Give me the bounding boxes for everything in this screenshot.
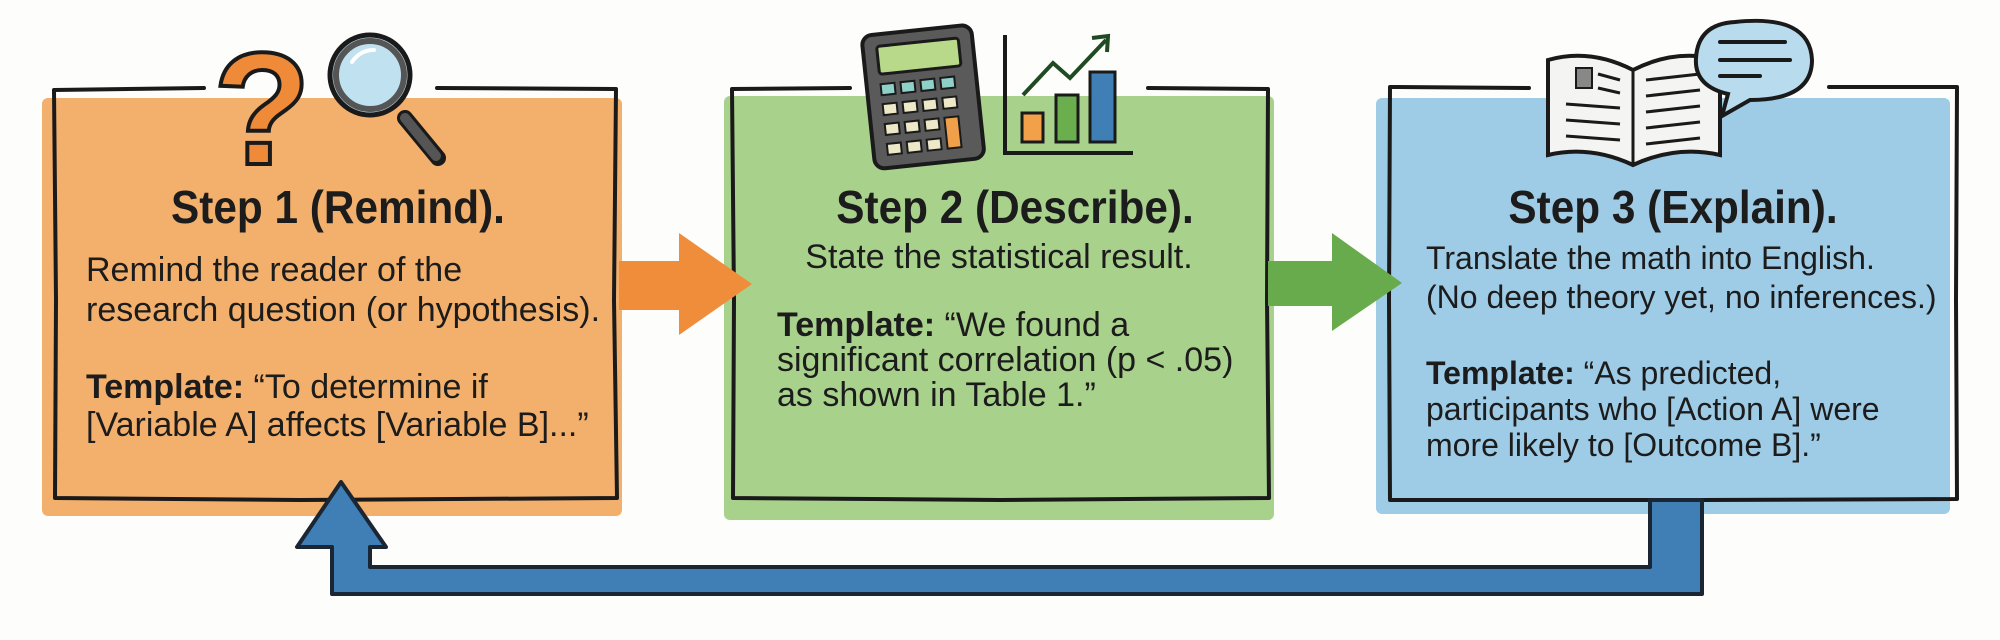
arrow: loop back from step 3 to step 1 — [297, 482, 1702, 594]
text: step 2 template: as shown in Table 1.” — [777, 376, 1096, 414]
heading: step 2: Step 2 (Describe). — [836, 181, 1194, 233]
text: step 2 template: Template: “We found a — [777, 306, 1129, 344]
panel: step 2 green — [724, 88, 1274, 520]
arrow: step 2 to step 3 — [1268, 233, 1402, 331]
icon: question mark: ? — [213, 19, 311, 198]
text: step 3 description — [1426, 240, 1936, 315]
heading: step 1: Step 1 (Remind). — [171, 181, 505, 233]
text: step 1 template: Template: “To determine if — [86, 368, 488, 406]
text: step 1 description: research question (or hypothesis). — [86, 291, 600, 329]
text: step 1 template — [86, 368, 589, 444]
arrow: step 1 to step 2 — [619, 233, 752, 335]
icon: open book — [1548, 56, 1720, 165]
text: step 3 template: Template: “As predicted, — [1426, 355, 1781, 391]
heading: step 3: Step 3 (Explain). — [1508, 181, 1838, 233]
icon: speech bubble — [1696, 21, 1812, 116]
text: step 2 template — [777, 306, 1233, 414]
text: step 3 description: Translate the math into English. — [1426, 240, 1875, 276]
text: step 1 description — [86, 251, 600, 329]
text: step 3 template: participants who [Action A] were — [1426, 391, 1880, 427]
icon: magnifying glass — [330, 35, 438, 158]
text: step 1 description: Remind the reader of the — [86, 251, 462, 289]
icon: calculator — [861, 25, 985, 169]
panel: step 1 orange — [42, 88, 622, 516]
text: step 2 description: State the statistical result. — [805, 238, 1193, 276]
text: step 2 template: significant correlation (p < .05) — [777, 341, 1233, 379]
text: step 3 template — [1426, 355, 1880, 463]
text: step 3 description: (No deep theory yet, no inferences.) — [1426, 279, 1936, 315]
icon: bar chart — [1005, 35, 1133, 153]
panel: step 3 blue — [1376, 87, 1957, 514]
text: step 1 template: [Variable A] affects [Variable B]...” — [86, 406, 589, 444]
text: step 3 template: more likely to [Outcome B].” — [1426, 427, 1821, 463]
